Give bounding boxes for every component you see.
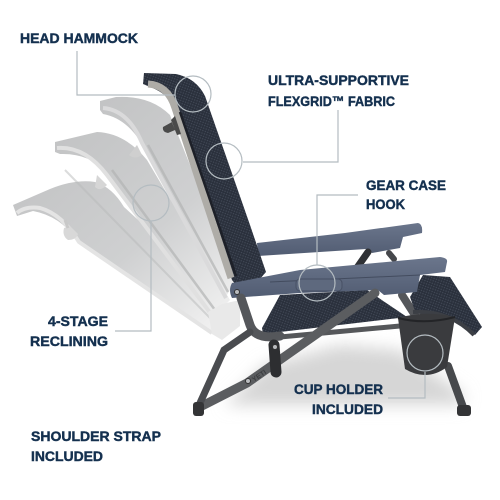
ghost recline positions [13, 97, 240, 340]
circle: fabric [206, 143, 242, 179]
label: 4-stage reclining: 4-STAGE [48, 313, 108, 329]
callout: gear case pointer [317, 195, 358, 265]
label: ultra-supportive fabric: ULTRA-SUPPORTIVE [268, 72, 409, 88]
ghost pivot brackets [208, 300, 240, 340]
frame fasteners [234, 290, 278, 384]
circle: gear case [299, 265, 335, 301]
label: shoulder strap: INCLUDED [31, 448, 103, 464]
cup holder [398, 314, 455, 375]
floor shadow [225, 345, 465, 405]
circle: head hammock [175, 76, 211, 112]
label: ultra-supportive fabric: FLEXGRID™ FABRIC [268, 93, 395, 109]
label: gear case hook: GEAR CASE [366, 177, 446, 193]
near armrest [230, 257, 447, 298]
head hammock bracket [163, 116, 181, 135]
label: cup holder [294, 381, 383, 417]
label: 4-stage reclining [30, 313, 108, 349]
ghost back: lowest [13, 181, 226, 335]
ghost back: second [100, 97, 236, 300]
backrest mesh [143, 73, 266, 296]
label: shoulder strap: SHOULDER STRAP [31, 428, 161, 444]
seat mesh [262, 290, 407, 334]
label: 4-stage reclining: RECLINING [30, 333, 108, 349]
backrest inner frame [148, 84, 231, 278]
callout: reclining pointer [115, 221, 151, 331]
gear case hook [296, 279, 342, 291]
callout: cup holder pointer [388, 372, 425, 398]
callout lines and circles [77, 51, 443, 398]
circle: cup holder [407, 335, 443, 371]
label: head hammock: HEAD HAMMOCK [20, 30, 138, 46]
frame logo: YETI [251, 369, 268, 384]
ghost back: third [55, 132, 230, 318]
far armrest [257, 223, 422, 256]
front frame [200, 293, 375, 407]
label: ultra-supportive fabric [268, 72, 409, 109]
rear legs and struts [280, 252, 464, 410]
label: shoulder strap [31, 428, 161, 464]
callout: fabric pointer [243, 110, 338, 162]
callout: head hammock pointer [77, 51, 175, 95]
label: gear case hook: HOOK [366, 196, 405, 212]
label: cup holder: INCLUDED [312, 401, 383, 417]
label: gear case hook [366, 177, 446, 212]
circle: reclining [133, 185, 169, 221]
label: cup holder: CUP HOLDER [294, 381, 383, 397]
seat front mesh [410, 275, 482, 335]
chair [143, 73, 482, 416]
feet [193, 402, 471, 416]
